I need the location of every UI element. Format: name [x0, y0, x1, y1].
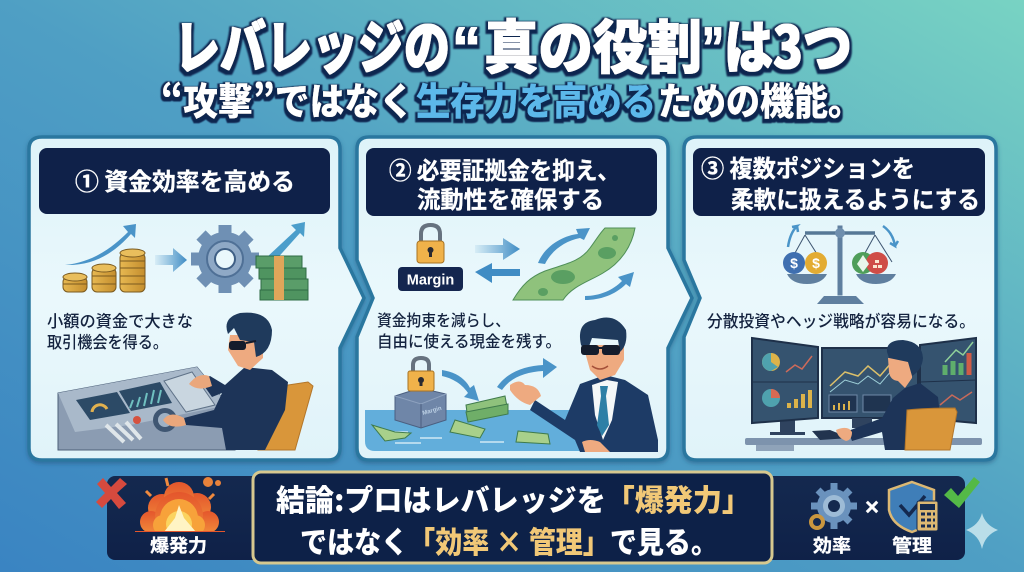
subtitle — [161, 71, 862, 126]
text: body 2: 自由に使える現金を残す。 — [377, 328, 561, 352]
conclusion box: 結論:プロはレバレッジを「爆発力」 — [276, 476, 751, 520]
icon: lock with margin label — [398, 225, 463, 291]
arrow: coins to gear — [155, 248, 187, 272]
icon: river of money — [513, 228, 635, 300]
arrows: exchange — [475, 238, 520, 283]
subtitle: 生存力を高める — [416, 71, 656, 126]
panel 2: margin and liquidity — [357, 137, 692, 460]
icon: green check — [944, 477, 980, 508]
title: は3つ — [724, 1, 852, 85]
title — [174, 1, 852, 85]
conclusion bar — [96, 472, 980, 563]
illustration: trader at three monitors — [745, 338, 982, 451]
illustration: trader at control desk — [58, 313, 313, 450]
heading 1 — [39, 148, 330, 214]
icon: explosion — [135, 477, 225, 532]
heading 3: 柔軟に扱えるようにする — [731, 180, 980, 215]
icon: balance scale — [783, 226, 898, 304]
text: body 1 — [47, 308, 193, 353]
title: レバレッジの — [174, 1, 450, 85]
conclusion box — [253, 472, 772, 563]
text: body 1: 小額の資金で大きな — [47, 308, 193, 332]
subtitle: “攻撃”ではなく — [161, 71, 414, 126]
icon: balance scale: $ — [812, 255, 820, 271]
heading 1: ① 資金効率を高める — [75, 162, 295, 197]
icon: management shield with calculator — [889, 482, 938, 532]
subtitle: ための機能。 — [658, 71, 862, 126]
illustration: locked margin box in water with money: Margin — [422, 406, 443, 417]
illustration: locked margin box in water with money — [365, 358, 580, 451]
icon: efficiency gear — [811, 483, 857, 529]
heading 2: ② 必要証拠金を抑え、 — [389, 151, 620, 186]
heading 2 — [366, 148, 657, 216]
panel 1: capital efficiency — [29, 137, 364, 460]
label: bakuhatsuryoku: 爆発力 — [150, 532, 207, 558]
icon: sparkle — [966, 513, 998, 549]
title: ” — [702, 16, 724, 81]
icon: growing coin stacks — [63, 224, 145, 292]
text: body 1: 取引機会を得る。 — [47, 329, 168, 353]
heading 2: 流動性を確保する — [417, 180, 604, 215]
icon: balance scale: $ — [790, 255, 798, 271]
label: management: 管理 — [892, 532, 932, 558]
heading 3 — [693, 148, 985, 216]
icon: red cross — [96, 478, 127, 509]
multiplication sign: × — [865, 494, 879, 521]
title: 真の役割 — [484, 1, 702, 85]
title: “ — [452, 16, 481, 81]
icon: gear with cash — [191, 222, 308, 300]
heading 3: ③ 複数ポジションを — [701, 149, 915, 184]
illustration: smiling businessman in sunglasses — [510, 318, 658, 452]
text: body 3: 分散投資やヘッジ戦略が容易になる。 — [707, 308, 975, 332]
text: body 2 — [377, 307, 561, 352]
label: efficiency: 効率 — [813, 532, 851, 558]
text: body 2: 資金拘束を減らし、 — [377, 307, 510, 331]
icon: lock with margin label: Margin — [407, 272, 454, 288]
panel 3: multiple positions — [684, 137, 996, 460]
conclusion box: ではなく「効率 × 管理」で見る。 — [300, 518, 718, 562]
